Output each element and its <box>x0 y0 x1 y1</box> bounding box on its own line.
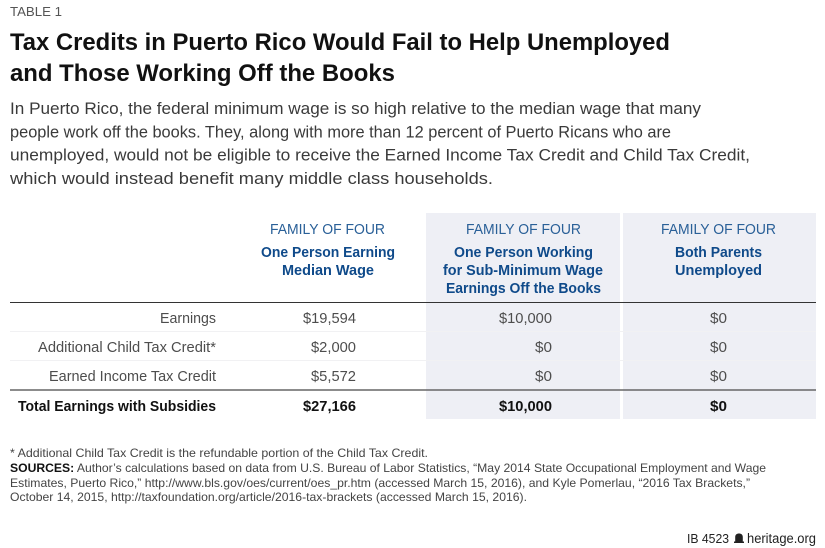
row: total earnings with subsidies: $27,166 <box>303 399 356 415</box>
table label: TABLE 1 <box>10 5 62 19</box>
row: earned income tax credit: $5,572 <box>311 369 356 385</box>
title: Tax Credits in Puerto Rico Would Fail to Help Unemployed <box>10 29 670 56</box>
table <box>10 213 816 419</box>
panel: shaded sub-minimum wage column <box>426 213 620 419</box>
intro text <box>9 99 750 188</box>
row: earned income tax credit <box>49 369 727 385</box>
panel: shaded unemployed column <box>623 213 816 419</box>
row: earned income tax credit: $0 <box>710 369 727 385</box>
column heading: both parents unemployed: Unemployed <box>675 263 762 279</box>
column heading: median wage <box>261 222 395 279</box>
column heading: median wage: FAMILY OF FOUR <box>270 222 385 238</box>
column heading: both parents unemployed: Both Parents <box>675 245 762 261</box>
row: total earnings with subsidies: Total Earnings with Subsidies <box>18 399 216 415</box>
footer: website: heritage.org <box>747 531 816 546</box>
column heading: sub-minimum wage: Earnings Off the Books <box>446 281 601 297</box>
column heading: median wage: One Person Earning <box>261 245 395 261</box>
column heading: both parents unemployed: FAMILY OF FOUR <box>661 222 776 238</box>
row: earned income tax credit: Earned Income Tax Credit <box>49 369 216 385</box>
row: earnings: $0 <box>710 311 727 327</box>
row: earnings: $19,594 <box>303 311 356 327</box>
footnote and sources: October 14, 2015, http://taxfoundation.org/article/2016-tax-brackets (accessed March 15, 2016). <box>10 490 527 504</box>
row: earnings: Earnings <box>160 311 216 327</box>
intro text: which would instead benefit many middle class households. <box>9 169 493 188</box>
footer: publication id: IB 4523 <box>687 531 729 546</box>
row: total earnings with subsidies <box>18 399 727 415</box>
title <box>10 29 670 87</box>
column heading: sub-minimum wage: for Sub-Minimum Wage <box>443 263 603 279</box>
row: additional child tax credit: $2,000 <box>311 340 356 356</box>
column heading: median wage: Median Wage <box>282 263 374 279</box>
intro text: unemployed, would not be eligible to receive the Earned Income Tax Credit and Child Tax Credit, <box>10 146 750 164</box>
row: earnings <box>160 311 727 327</box>
row: earned income tax credit: $0 <box>535 369 552 385</box>
row: earnings: $10,000 <box>499 311 552 327</box>
column heading: sub-minimum wage: One Person Working <box>454 245 593 261</box>
footnote and sources: Estimates, Puerto Rico,” http://www.bls.gov/oes/current/oes_pr.htm (accessed March 15, 2016), and Kyle Pomerlau, “2016 Tax Brackets,” <box>10 476 750 490</box>
title: and Those Working Off the Books <box>10 60 395 87</box>
column heading: sub-minimum wage: FAMILY OF FOUR <box>466 222 581 238</box>
intro text: people work off the books. They, along with more than 12 percent of Puerto Ricans who are <box>10 122 671 142</box>
row: total earnings with subsidies: $10,000 <box>499 399 552 415</box>
column heading: sub-minimum wage <box>443 222 603 297</box>
icon: heritage bell <box>734 534 744 543</box>
footnote and sources: SOURCES: Author’s calculations based on data from U.S. Bureau of Labor Statistics, “May 2014 State Occupational Employment and Wage <box>10 461 766 475</box>
row: additional child tax credit <box>38 340 727 356</box>
intro text: In Puerto Rico, the federal minimum wage is so high relative to the median wage that many <box>10 99 701 118</box>
row: additional child tax credit: $0 <box>710 340 727 356</box>
footnote and sources <box>10 446 766 504</box>
column heading: both parents unemployed <box>661 222 776 279</box>
row: total earnings with subsidies: $0 <box>710 399 727 415</box>
footnote and sources: * Additional Child Tax Credit is the refundable portion of the Child Tax Credit. <box>10 446 428 460</box>
row: additional child tax credit: $0 <box>535 340 552 356</box>
row: additional child tax credit: Additional Child Tax Credit* <box>38 340 216 356</box>
